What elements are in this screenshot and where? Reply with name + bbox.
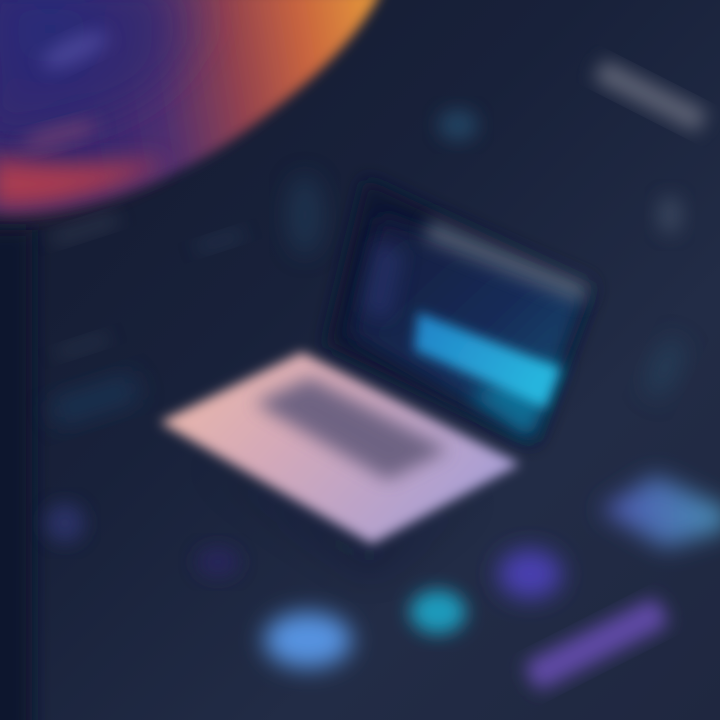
- sphere: red lower rim: [0, 155, 170, 209]
- mark: right streak: [639, 333, 691, 403]
- screen: cyan bar: [414, 312, 560, 408]
- mark: purple dot bottom: [196, 546, 240, 578]
- mark: purple dot left: [45, 503, 85, 543]
- faint background marks: [45, 58, 709, 578]
- laptop: shadow: [200, 460, 480, 570]
- icon: purple bar: [522, 596, 671, 692]
- screen: left column: [362, 240, 405, 320]
- mark: left streak: [50, 212, 120, 246]
- laptop: [160, 178, 595, 570]
- mark: grey bar top right: [593, 58, 709, 133]
- mark: blue dot top: [438, 109, 478, 141]
- icon: blue pill: [264, 612, 352, 668]
- screen: teal corner: [470, 360, 565, 438]
- mark: blue patch left: [48, 372, 142, 428]
- mark: right grey dot: [656, 195, 684, 235]
- left dark strip: [0, 230, 32, 720]
- icons bottom row: [264, 475, 720, 692]
- icon: violet dot: [498, 549, 562, 599]
- mark: left streak 2: [194, 228, 246, 254]
- icon: cyan dot: [410, 590, 466, 634]
- mark: left streak 3: [54, 332, 110, 360]
- screen: top bar: [425, 220, 590, 302]
- base: keyboard: [255, 378, 448, 480]
- icon: blue card right: [600, 475, 720, 548]
- laptop: screen: [325, 178, 595, 445]
- sphere: gradient planet top-left: [0, 0, 382, 214]
- laptop: base: [160, 352, 520, 544]
- mark: center-left vertical: [287, 175, 323, 255]
- sphere: light streaks: [37, 24, 113, 76]
